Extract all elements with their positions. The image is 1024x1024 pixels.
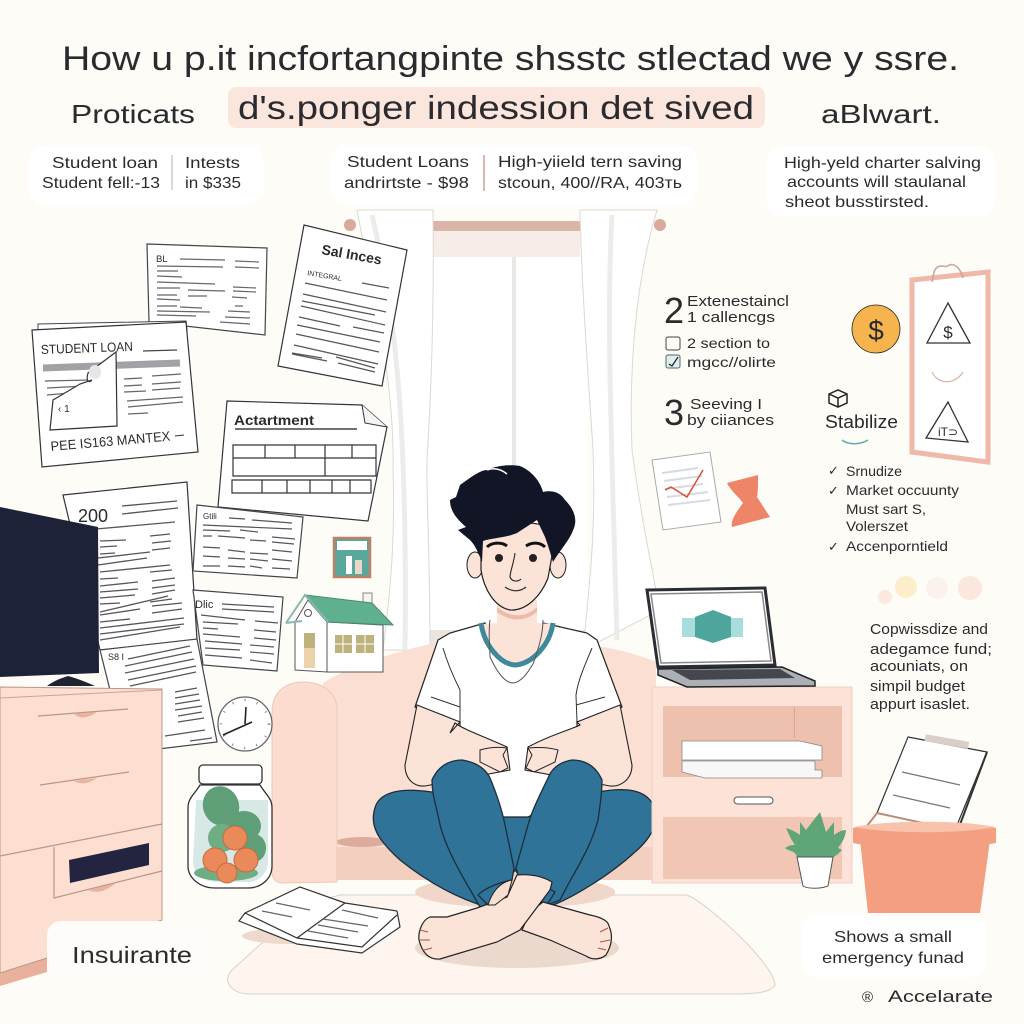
clipboard bbox=[912, 264, 988, 462]
footer brand bbox=[862, 987, 993, 1006]
document: small guide bbox=[193, 505, 303, 578]
document: sal inces: INTEGRAL bbox=[307, 270, 342, 283]
budget note: acouniats, on bbox=[870, 659, 968, 675]
television bbox=[0, 507, 99, 686]
document: 200 page bbox=[63, 482, 197, 650]
info card: high-yield charter: accounts will staulanal bbox=[787, 174, 966, 191]
document: student loan: ‹ 1 bbox=[58, 404, 70, 415]
info card: student loan: Student loan bbox=[52, 155, 158, 172]
terracotta pot bbox=[853, 822, 996, 913]
document: sal inces bbox=[278, 225, 407, 386]
ears bbox=[467, 552, 483, 578]
person bbox=[373, 465, 656, 968]
arms bbox=[405, 705, 510, 786]
front knees bbox=[432, 760, 514, 907]
footer brand: Accelarate bbox=[888, 987, 993, 1006]
stabilize heading bbox=[825, 390, 898, 444]
info card: student loan: in $335 bbox=[185, 175, 241, 192]
info card: student loans and savings: andrirtste - $98 bbox=[344, 175, 469, 192]
title: How u p.it incfortangpinte shsstc stlectad we y ssre. bbox=[62, 40, 959, 78]
info card: student loan: Student fell:-13 bbox=[42, 175, 160, 192]
icon: coin: $ bbox=[868, 315, 884, 346]
document: top small: BL bbox=[156, 254, 168, 265]
checklist bbox=[828, 463, 959, 554]
callout: emergency fund: emergency funad bbox=[822, 950, 964, 967]
checklist: ✓ bbox=[828, 463, 839, 478]
document: top small bbox=[147, 244, 267, 335]
callout: emergency fund: Shows a small bbox=[834, 929, 952, 946]
hands bbox=[480, 747, 508, 772]
callout: insurance bbox=[47, 921, 213, 986]
subtitle row: aBlwart. bbox=[821, 99, 941, 129]
document: dtc: Dlic bbox=[195, 599, 214, 611]
window with curtains bbox=[344, 210, 666, 650]
steps list: 2 section to bbox=[687, 335, 770, 351]
steps list: 1 callencgs bbox=[687, 309, 775, 326]
checklist: ✓ bbox=[828, 539, 839, 554]
icon: jar with plants and coins bbox=[188, 765, 272, 888]
steps list: mgcc//olirte bbox=[687, 354, 776, 370]
face details bbox=[487, 543, 545, 547]
subtitle row: Proticats bbox=[71, 99, 195, 129]
budget note: simpil budget bbox=[870, 679, 965, 695]
document: sal inces: Sal Inces bbox=[320, 241, 383, 268]
subtitle row bbox=[71, 87, 941, 129]
rug bbox=[228, 895, 775, 994]
info card: student loans and savings: stcoun, 400//RA, 403ть bbox=[498, 175, 682, 192]
shirt bbox=[415, 623, 622, 817]
info card: high-yield charter: High-yeld charter salving bbox=[784, 155, 981, 172]
back legs bbox=[373, 790, 656, 908]
info card: student loan bbox=[28, 145, 264, 205]
hair bbox=[450, 465, 575, 562]
icon: bow bbox=[727, 475, 770, 527]
neck bbox=[482, 600, 552, 663]
budget note: Copwissdize and bbox=[870, 622, 988, 638]
clipboard: iT⊃ bbox=[938, 425, 958, 439]
checklist: Must sart S, bbox=[846, 501, 926, 517]
budget note bbox=[870, 622, 992, 713]
steps list: Seeving I bbox=[690, 396, 762, 413]
callout: emergency fund bbox=[802, 915, 986, 977]
icon: coin bbox=[852, 305, 900, 353]
info card: high-yield charter: sheot busstirsted. bbox=[785, 194, 929, 211]
checklist: ✓ bbox=[828, 483, 839, 498]
steps list: by ciiances bbox=[687, 412, 774, 429]
document: lower left: S8 I bbox=[108, 652, 124, 662]
steps list: 3 bbox=[664, 392, 684, 433]
open book bbox=[239, 887, 400, 953]
checklist: Srnudize bbox=[846, 463, 902, 479]
icon: clock bbox=[218, 697, 272, 751]
document: student loan: STUDENT LOAN bbox=[41, 339, 133, 357]
budget note: appurt isaslet. bbox=[870, 697, 970, 713]
checklist: Market occuunty bbox=[846, 482, 959, 498]
document: student loan bbox=[32, 321, 198, 467]
budget note: adegamce fund; bbox=[870, 642, 992, 658]
document: lower left bbox=[100, 639, 217, 750]
stabilize heading: Stabilize bbox=[825, 412, 898, 432]
info card: student loans and savings bbox=[330, 145, 698, 205]
subtitle row: d's.ponger indession det sived bbox=[238, 89, 754, 126]
document: actartment table: Actartment bbox=[234, 412, 314, 428]
checklist: Accenporntield bbox=[846, 538, 948, 554]
clipboard paper leaning in pot bbox=[867, 734, 987, 830]
callout: insurance: Insuirante bbox=[72, 942, 192, 968]
info card: high-yield charter bbox=[766, 146, 996, 216]
clipboard: $ bbox=[943, 323, 953, 342]
decorative dots bbox=[878, 576, 982, 604]
document: 200 page: 200 bbox=[78, 506, 108, 526]
small potted plant bbox=[785, 812, 846, 888]
shadow under feet bbox=[415, 928, 619, 968]
document: actartment table bbox=[218, 401, 387, 521]
document: dtc bbox=[193, 590, 283, 671]
icon: house bbox=[286, 593, 393, 672]
face bbox=[481, 520, 553, 610]
feet bbox=[522, 902, 611, 959]
info card: student loans and savings: High-yiield tern saving bbox=[498, 154, 682, 171]
dresser bbox=[0, 687, 162, 986]
picture frame bbox=[334, 538, 370, 577]
steps list bbox=[664, 290, 789, 433]
steps list: 2 bbox=[664, 290, 684, 331]
chart paper bbox=[652, 452, 721, 530]
sofa bbox=[272, 643, 656, 883]
document: small guide: Gtili bbox=[203, 512, 217, 521]
info card: student loans and savings: Student Loans bbox=[347, 154, 469, 171]
side table bbox=[652, 687, 852, 883]
document: student loan: PEE IS163 MANTEX bbox=[50, 429, 171, 454]
laptop bbox=[647, 588, 815, 687]
steps list: Extenestaincl bbox=[687, 293, 789, 310]
info card: student loan: Intests bbox=[185, 155, 240, 172]
footer brand: ® bbox=[862, 989, 873, 1006]
checklist: Volerszet bbox=[846, 518, 908, 534]
